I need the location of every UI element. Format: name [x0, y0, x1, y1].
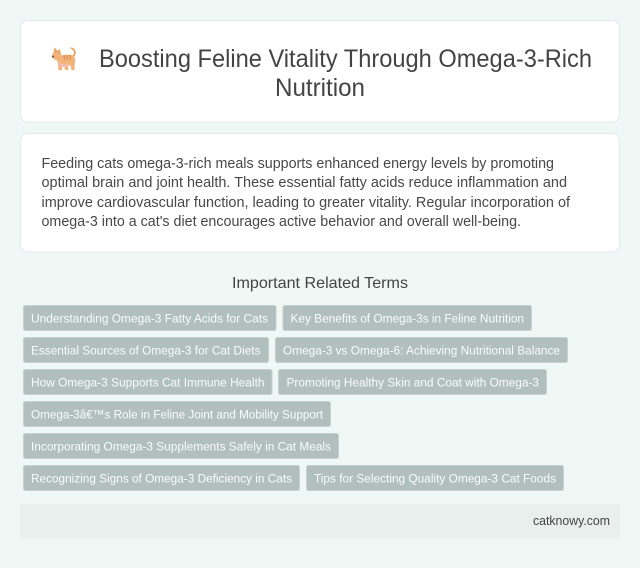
- tag: Key Benefits of Omega-3s in Feline Nutrition: [290, 311, 524, 325]
- tag: [276, 338, 568, 362]
- tag: [24, 306, 276, 330]
- tag: Tips for Selecting Quality Omega-3 Cat Foods: [314, 471, 556, 485]
- tag: Understanding Omega-3 Fatty Acids for Cats: [31, 311, 268, 325]
- tag: [306, 466, 564, 490]
- text block: description: improve cardiovascular function, leading to greater vitality. Regular incorporation of: [42, 195, 571, 211]
- text block: description: optimal brain and joint health. These essential fatty acids reduce inflammation and: [42, 175, 567, 191]
- tag: [24, 338, 268, 362]
- title: [99, 45, 592, 102]
- tag: [24, 434, 338, 458]
- panel: description card: [20, 134, 620, 252]
- tag: [278, 370, 546, 394]
- icon: cat: [52, 47, 76, 70]
- tag: Incorporating Omega-3 Supplements Safely in Cat Meals: [31, 439, 331, 453]
- text block: description: Feeding cats omega-3-rich meals supports enhanced energy levels by promoting: [42, 156, 554, 172]
- footer text: site name: catknowy.com: [533, 513, 610, 528]
- footer bar: [20, 504, 620, 538]
- tag list: related terms: [24, 306, 568, 490]
- tag: How Omega-3 Supports Cat Immune Health: [31, 375, 265, 389]
- tag: [24, 466, 300, 490]
- tag: Essential Sources of Omega-3 for Cat Diets: [31, 343, 260, 357]
- heading: related terms: Important Related Terms: [232, 275, 408, 292]
- tag: Omega-3â€™s Role in Feline Joint and Mobility Support: [31, 407, 324, 421]
- title: Nutrition: [275, 74, 365, 102]
- tag: [24, 370, 272, 394]
- tag: [24, 402, 330, 426]
- tag: [283, 306, 532, 330]
- text block: description: [42, 156, 571, 230]
- panel: title card: [20, 20, 620, 122]
- tag: Omega-3 vs Omega-6: Achieving Nutritional Balance: [283, 343, 560, 357]
- tag: Promoting Healthy Skin and Coat with Omega-3: [286, 375, 539, 389]
- tag: Recognizing Signs of Omega-3 Deficiency in Cats: [31, 471, 292, 485]
- title: Boosting Feline Vitality Through Omega-3-Rich: [99, 45, 592, 73]
- text block: description: omega-3 into a cat's diet encourages active behavior and overall well-being.: [42, 214, 521, 230]
